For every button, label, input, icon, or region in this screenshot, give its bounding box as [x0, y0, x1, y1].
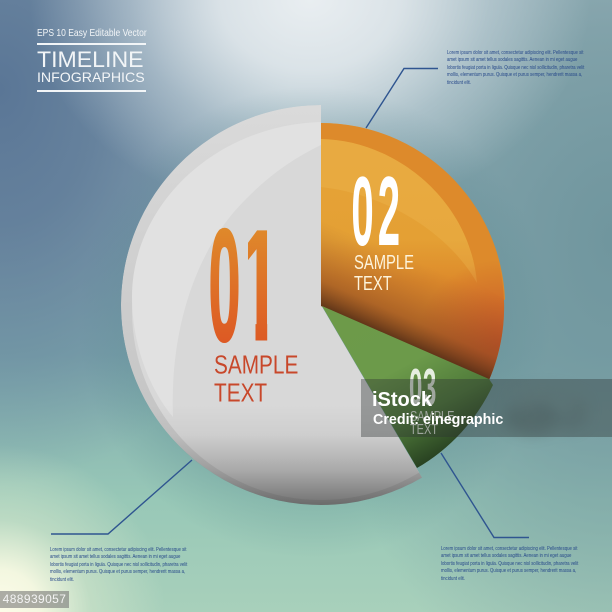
label: sample text 02: TEXT	[354, 272, 392, 295]
label: sample text 03: SAMPLE	[410, 407, 455, 424]
number 01: 0	[208, 197, 241, 375]
label: sample text 01	[214, 350, 298, 407]
connector: bottom right	[441, 453, 529, 538]
label: sample text 03: TEXT	[410, 420, 438, 437]
main chart	[51, 68, 612, 538]
watermark credit: Credit: einegraphic	[373, 412, 503, 428]
number 01	[210, 228, 268, 343]
watermark logo: iStock	[372, 389, 432, 411]
text block: bottom right: lobortis feugiat porta in ligula. Quisque nec nisl sollicitudin, pharetra velit	[441, 561, 578, 567]
label: sample text 03	[410, 407, 455, 437]
text block: bottom right: tincidunt elit.	[441, 576, 465, 582]
watermark band	[361, 379, 612, 437]
label: sample text 02: SAMPLE	[354, 251, 414, 274]
number 02: 0	[351, 156, 374, 266]
header block	[37, 27, 147, 92]
number 03	[409, 357, 436, 417]
title: TIMELINE	[37, 47, 144, 72]
text block: bottom left: Lorem ipsum dolor sit amet, consectetur adipiscing elit. Pellentesque sit	[50, 547, 186, 553]
connector: bottom left	[51, 460, 192, 534]
number 03: 3	[423, 357, 436, 417]
text block: top right	[447, 50, 584, 86]
subtitle: INFOGRAPHICS	[37, 69, 145, 85]
text block: bottom right: Lorem ipsum dolor sit amet, consectetur adipiscing elit. Pellentesque sit	[441, 546, 577, 552]
number 02	[351, 156, 400, 266]
text block: bottom left: lobortis feugiat porta in ligula. Quisque nec nisl sollicitudin, pharetra velit	[50, 562, 187, 568]
text block: bottom left: amet ipsum sit amet tellus sodales sagittis. Aenean in mi eget augue	[50, 554, 180, 560]
connector: top right	[366, 68, 438, 128]
text block: top right: Lorem ipsum dolor sit amet, consectetur adipiscing elit. Pellentesque sit	[447, 50, 583, 56]
text block: bottom left: mollis, elementum purus. Quisque et purus semper, hendrerit massa a,	[50, 569, 185, 575]
number 03: 0	[409, 357, 422, 417]
text block: bottom left	[50, 547, 188, 583]
text block: top right: amet ipsum sit amet tellus sodales sagittis. Aenean in mi eget augue	[447, 57, 577, 63]
label: sample text 01: TEXT	[214, 378, 267, 407]
number 02: 2	[378, 156, 400, 266]
panel: 03 green slice	[322, 306, 493, 468]
panel: 01 grey slice	[121, 105, 422, 505]
watermark text	[372, 389, 503, 428]
image id tag: 488939057	[3, 592, 66, 606]
eyebrow: EPS 10 Easy Editable Vector	[37, 27, 147, 39]
label: sample text 02	[354, 251, 414, 295]
number 01: 1	[239, 195, 281, 375]
text block: bottom right: mollis, elementum purus. Quisque et purus semper, hendrerit massa a,	[441, 568, 576, 574]
panel: 02 orange slice	[321, 123, 505, 380]
text block: top right: lobortis feugiat porta in ligula. Quisque nec nisl sollicitudin, pharetra velit	[447, 65, 584, 71]
text block: top right: tincidunt elit.	[447, 80, 471, 86]
text block: top right: mollis, elementum purus. Quisque et purus semper, hendrerit massa a,	[447, 72, 582, 78]
text block: bottom left: tincidunt elit.	[50, 577, 74, 583]
text block: bottom right: amet ipsum sit amet tellus sodales sagittis. Aenean in mi eget augue	[441, 553, 571, 559]
text block: bottom right	[441, 546, 578, 582]
circle shadow	[78, 86, 550, 558]
label: sample text 01: SAMPLE	[214, 350, 298, 379]
